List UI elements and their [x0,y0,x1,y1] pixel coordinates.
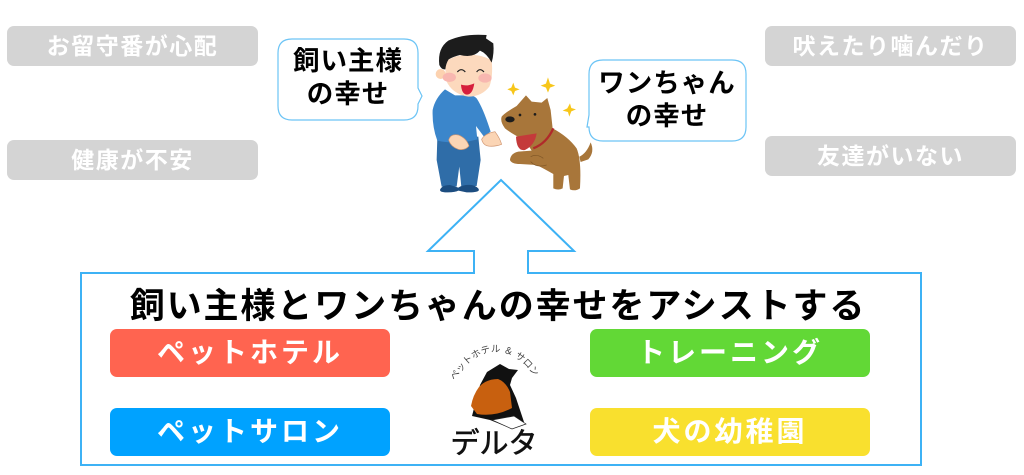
worry: barking and biting: 吠えたり噛んだり [792,32,988,58]
speech bubble: dog's happiness: ワンちゃん [598,68,736,98]
speech bubble: dog's happiness: の幸せ [626,101,708,131]
worry: home alone [7,26,258,66]
logo: Delta: デルタ [450,427,538,460]
worry: barking and biting [765,26,1016,66]
service: training [590,329,870,377]
worry: no friends [765,136,1016,176]
service: training: トレーニング [637,337,823,368]
panel heading: 飼い主様とワンちゃんの幸せをアシストする [130,286,866,326]
worry: health [7,140,258,180]
worry: home alone: お留守番が心配 [47,32,218,58]
worry: health: 健康が不安 [71,146,194,172]
worry: no friends: 友達がいない [817,142,964,168]
speech bubble: owner's happiness: 飼い主様 [293,46,403,76]
service: dog kindergarten [590,408,870,456]
service: pet hotel [110,329,390,377]
speech bubble: owner's happiness: の幸せ [307,79,389,109]
service: pet salon: ペットサロン [157,416,343,447]
service: pet salon [110,408,390,456]
service: dog kindergarten: 犬の幼稚園 [652,416,808,447]
logo: Delta: ペットホテル ＆ サロン [452,344,538,379]
service: pet hotel: ペットホテル [157,337,343,368]
